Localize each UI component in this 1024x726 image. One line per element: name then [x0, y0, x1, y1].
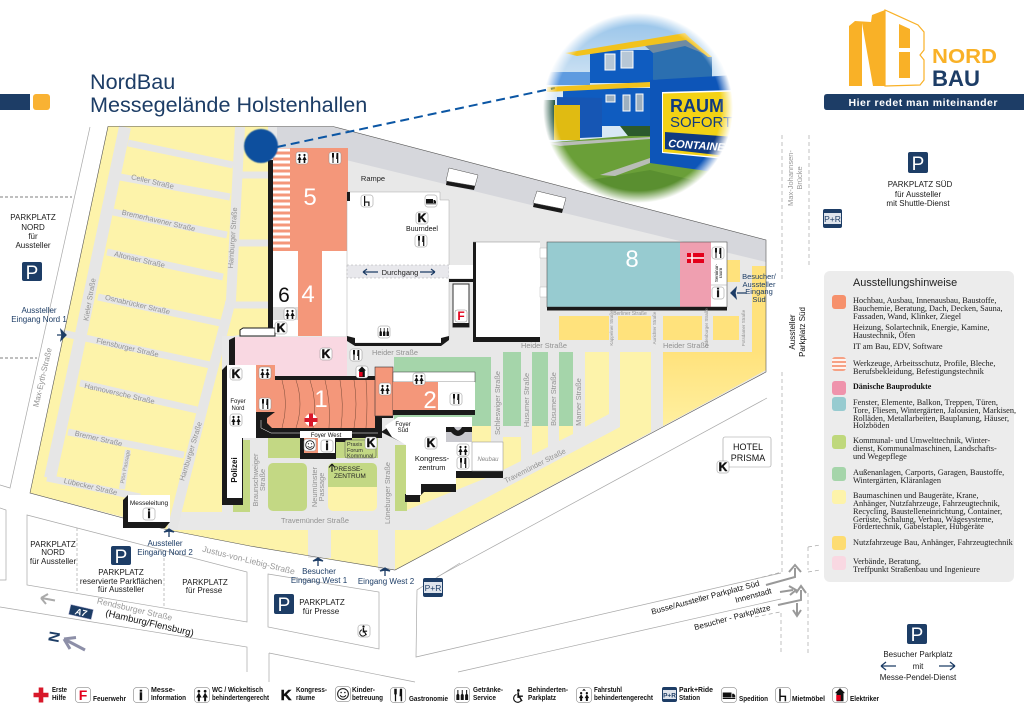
legend item: Messe-Information	[134, 687, 186, 703]
parking: reservierte Parkflächen: reservierte Parkflächen	[80, 577, 162, 586]
arrow: west	[41, 594, 55, 604]
legend text: Außenanlagen, Carports, Garagen, Baustoffe,	[853, 468, 1004, 477]
A7 sign	[69, 605, 93, 620]
photo: container building: SOFORT	[670, 114, 732, 131]
street labels: Neumünster	[310, 466, 319, 507]
street labels: Flensburger Straße	[96, 336, 160, 359]
legend item: Feuerwehr: F	[79, 687, 88, 703]
legend item: Behinderten-Parkplatz	[514, 687, 569, 702]
parking: reservierte Parkflächen: P	[115, 547, 127, 568]
K icon hall 6: K	[277, 321, 286, 335]
slogan banner: Hier redet man miteinander	[848, 97, 998, 109]
street labels: Braunschweiger	[251, 453, 260, 506]
P+R upper	[823, 209, 842, 228]
parking Besucher Pendel: Besucher Parkplatz	[883, 650, 953, 659]
street labels: Aurichter Straße	[652, 311, 657, 344]
hall 8	[547, 242, 727, 310]
legend item: Gastronomie: Gastronomie	[409, 696, 448, 703]
label: Max-Johannsen-Brücke: Brücke	[795, 166, 804, 190]
logo mark: B	[885, 10, 924, 86]
legend item: Park+Ride: Station	[679, 695, 700, 702]
legend text: Rolläden, Metallarbeiten, Bauplanung, Häuser,	[853, 414, 1009, 423]
hall 6 and 4: 4	[301, 281, 315, 308]
photo: container building	[544, 14, 732, 202]
legend item: Kongressräume	[281, 687, 328, 704]
street labels: Heider Straße	[372, 348, 418, 357]
Kongresszentrum: Neubau	[477, 457, 499, 463]
hall white centre	[473, 242, 547, 342]
legend item: Kongressräume: räume	[296, 695, 315, 702]
Kongresszentrum	[381, 417, 503, 502]
legend item: Fahrstuhl: behindertengerecht	[594, 695, 654, 702]
road labels south: (Hamburg/Flensburg)	[104, 608, 195, 639]
legend item: Messe-Information: Messe-	[151, 687, 176, 694]
entrance: Aussteller Eingang Nord 2	[137, 529, 193, 557]
band buildings	[446, 168, 566, 213]
Kongresszentrum: Süd	[398, 428, 408, 434]
title: Messegelände Holstenhallen	[90, 92, 367, 117]
parking Süd: P	[912, 154, 924, 175]
street labels: Max-Eyth-Straße	[31, 346, 54, 408]
logo wordmark: NORD	[932, 45, 997, 68]
legend text: dienst, Kommunalmaschinen, Landschafts-	[853, 444, 997, 453]
legend item: Erste Hilfe: Erste	[52, 687, 67, 694]
street labels: Travemünder Straße	[503, 446, 567, 485]
legend text: Hochbau, Ausbau, Innenausbau, Baustoffe,	[853, 296, 996, 305]
legend text: Haustechnik, Öfen	[853, 331, 916, 340]
marker: location circle	[244, 129, 278, 163]
hall 5	[268, 148, 348, 330]
street labels: Hannoversche Straße	[84, 381, 156, 406]
Praxis Forum Kommunal: Praxis	[347, 442, 363, 448]
legend item: Fahrstuhl	[576, 687, 654, 702]
Foyer West: Foyer West	[311, 433, 342, 439]
label: Aussteller Parkplatz Süd: Parkplatz Süd	[798, 307, 807, 357]
direction arrows and labels: Besucher - Parkplätze	[693, 603, 772, 632]
street labels: Lüneburger Straße	[383, 462, 392, 524]
info icon hall 8	[712, 286, 724, 300]
legend item: Kinderbetreuung: Kinder-	[352, 687, 376, 694]
legend text: Kommunal- und Umwelttechnik, Winter-	[853, 436, 990, 445]
P+R lower: P+R	[425, 583, 441, 593]
parking Besucher Pendel: P	[911, 625, 923, 646]
legend item: Getränke-Service	[454, 687, 504, 702]
Pressezentrum: ZENTRUM	[334, 473, 366, 480]
entrance: Eingang Süd: Aussteller	[743, 280, 776, 289]
legend text: Gerüste, Schalung, Verbau, Wägesysteme,	[853, 515, 993, 524]
hall 8: Seminar-	[714, 263, 719, 282]
hall 1	[256, 376, 382, 459]
parking: Presse Mitte: PARKPLATZ	[182, 578, 228, 587]
Foyer Nord	[222, 365, 275, 505]
legend item: WC: behindertengerecht	[212, 695, 270, 702]
Feuerwehr building: F	[457, 309, 465, 323]
photo: container building: RAUM	[670, 96, 724, 116]
entrance: Aussteller Eingang Nord 2: Aussteller	[147, 539, 183, 548]
parking: Nord für Aussteller: NORD	[41, 548, 65, 557]
road labels south: Rendsburger Straße	[96, 596, 174, 623]
parking: Presse: PARKPLATZ	[299, 598, 345, 607]
yellow blocks east	[407, 352, 609, 510]
street labels: Celler Straße	[130, 172, 175, 191]
north arrow	[44, 630, 85, 650]
header bar: left accents	[0, 94, 50, 110]
flag: Dänemark	[687, 253, 704, 263]
parking Süd: PARKPLATZ SÜD	[888, 180, 953, 189]
legend item: Feuerwehr	[76, 687, 126, 703]
parking: Presse: für Presse	[303, 607, 340, 616]
label: Max-Johannsen-Brücke: Max-Johannsen-	[786, 150, 795, 206]
street labels	[31, 172, 746, 525]
Foyer Nord: Nord	[231, 406, 245, 412]
icons Heider Straße	[350, 349, 368, 378]
green blocks: Kommunaltechnik	[233, 438, 407, 512]
road labels south	[96, 544, 296, 639]
K icon Buurndeel: K	[418, 211, 427, 225]
street labels: Heider Straße	[663, 341, 709, 350]
legend item: Erste Hilfe: Hilfe	[52, 695, 66, 702]
entrance: Aussteller Eingang Nord 1: Aussteller	[21, 306, 57, 315]
Foyer West	[300, 431, 352, 453]
street labels: Kieler Straße	[81, 278, 98, 322]
P+R upper: P+R	[824, 214, 841, 224]
legend item: Behinderten-Parkplatz: Parkplatz	[528, 695, 556, 702]
yellow block Presse	[328, 487, 377, 511]
legend item: Kinderbetreuung	[336, 686, 383, 702]
dashed connector	[277, 88, 555, 147]
legend item: Spedition	[722, 688, 768, 703]
legend title: Ausstellungshinweise	[853, 277, 957, 289]
hall 8: 8	[625, 246, 639, 273]
foyer east	[375, 367, 393, 418]
street labels: Berliner Straße	[613, 311, 647, 317]
legend text: Treffpunkt Straßenbau und Ingenieure	[853, 565, 980, 574]
legend item: Kongressräume: K	[281, 687, 292, 704]
hall 8: raum	[718, 268, 723, 278]
legend text: IT am Bau, EDV, Software	[853, 342, 943, 351]
parking: Presse: P	[278, 595, 290, 616]
legend item: Gastronomie	[390, 688, 448, 703]
yellow zone south	[168, 352, 651, 570]
Praxis Forum Kommunal: K	[367, 436, 376, 450]
Hotel Prisma	[717, 437, 771, 474]
rampe band	[277, 127, 766, 262]
parking: Nord für Aussteller: für Aussteller	[30, 557, 76, 566]
photo: container building: CONTAINER	[668, 138, 733, 155]
direction arrows and labels	[650, 565, 806, 632]
hall 2: 2	[423, 387, 437, 414]
hall 2	[393, 372, 475, 415]
legend text: Fassaden, Wand, Klinker, Ziegel	[853, 312, 962, 321]
parking Süd: mit Shuttle-Dienst	[886, 199, 950, 208]
street labels: Passage	[317, 473, 326, 501]
site outline	[30, 126, 766, 570]
exhibition site base	[30, 126, 766, 570]
Polizei: Polizei	[230, 457, 239, 483]
entrance: Eingang West 2: Eingang West 2	[358, 577, 415, 586]
legend text: Holzböden	[853, 421, 890, 430]
label: Aussteller Parkplatz Süd: Aussteller	[788, 314, 797, 350]
legend item: Park+Ride	[662, 687, 713, 702]
legend item: Getränke-Service: Getränke-	[473, 687, 504, 694]
Praxis Forum Kommunal: Forum	[347, 448, 363, 454]
legend item: Erste Hilfe	[34, 687, 67, 702]
info icon hall 8: i	[716, 286, 720, 300]
logo	[849, 10, 997, 91]
legend text: Dänische Bauprodukte	[853, 382, 932, 391]
south streets	[308, 528, 395, 570]
parking: Nord: NORD	[21, 223, 45, 232]
street labels: Oldenburger Straße	[704, 308, 709, 348]
parking Süd	[886, 152, 953, 208]
hall 5: 5	[303, 184, 317, 211]
Praxis Forum Kommunal	[345, 436, 377, 460]
Messeleitung: Messeleitung	[130, 500, 169, 507]
label: Aussteller Parkplatz Süd	[788, 307, 807, 357]
hall Buurndeel	[347, 174, 449, 346]
legend text: Tore, Fliesen, Wintergärten, Jalousien, Markisen,	[853, 406, 1016, 415]
parking: Nord für Aussteller	[30, 540, 76, 566]
Hotel Prisma: PRISMA	[731, 453, 765, 463]
street labels: Straße	[258, 469, 267, 491]
west streets	[47, 127, 268, 530]
A7 sign: A7	[73, 606, 89, 619]
legend swatches	[832, 295, 846, 570]
street labels: Bremerhavener Straße	[121, 208, 196, 233]
Hotel Prisma: K	[719, 460, 728, 474]
legend item: Behinderten-Parkplatz: Behinderten-	[528, 687, 569, 694]
legend item: Spedition: Spedition	[739, 696, 768, 703]
street labels: Kappelner Straße	[609, 310, 614, 346]
entrance: Eingang Süd: Süd	[752, 295, 766, 304]
Praxis Forum Kommunal: Kommunal	[347, 454, 373, 460]
legend text: Bauchemie, Beratung, Dach, Decken, Sauna,	[853, 304, 1003, 313]
legend text: Fenster, Elemente, Balkon, Treppen, Türen,	[853, 398, 998, 407]
legend item: Park+Ride: P+R	[663, 692, 676, 700]
parking: Presse	[274, 594, 370, 637]
street labels: Marner Straße	[574, 378, 583, 426]
legend text: Anhänger, Nutzfahrzeuge, Fahrzeugtechnik,	[853, 499, 1000, 508]
Kongresszentrum: Foyer	[395, 422, 411, 428]
street labels: Hamburger Straße	[177, 421, 204, 482]
legend item: Elektriker	[832, 688, 879, 703]
legend item: WC	[194, 687, 270, 702]
parking: Nord: P	[26, 263, 38, 284]
legend text: Werkzeuge, Arbeitsschutz, Profile, Bleche,	[853, 359, 995, 368]
Hotel Prisma: HOTEL	[733, 442, 763, 452]
legend item: Mietmöbel: Mietmöbel	[792, 696, 825, 703]
parking Besucher Pendel	[880, 624, 957, 682]
street labels: Osnabrücker Straße	[104, 293, 171, 316]
Foyer Nord: K	[232, 367, 241, 381]
pink hall Verbände	[229, 337, 347, 377]
parking: Nord für Aussteller: PARKPLATZ	[30, 540, 76, 549]
title: NordBau	[90, 69, 175, 94]
entrance: Aussteller Eingang Nord 1: Eingang Nord 1	[11, 315, 67, 324]
Durchgang	[347, 265, 473, 278]
title	[90, 69, 367, 117]
parking: Nord: für	[28, 232, 38, 241]
Foyer Nord: Foyer	[230, 399, 246, 405]
logo mark: N	[849, 10, 885, 86]
label: Max-Johannsen-Brücke	[786, 150, 804, 206]
Kongresszentrum: K	[427, 436, 436, 450]
street labels: Altonaer Straße	[113, 249, 166, 270]
slogan banner	[824, 94, 1024, 110]
hall Buurndeel: Buurndeel	[406, 226, 438, 233]
legend item: Messe-Information: i	[139, 687, 143, 703]
street labels: Bremer Straße	[74, 429, 123, 448]
parking: reservierte Parkflächen: für Aussteller	[98, 585, 144, 594]
street labels: Husumer Straße	[522, 373, 531, 427]
bottom icon legend	[34, 686, 879, 704]
legend text: Fördertechnik, Gabelstapler, Hubgeräte	[853, 522, 984, 531]
legend text: Recycling, Baustelleneinrichtung, Container,	[853, 507, 1002, 516]
Durchgang: Durchgang	[382, 268, 418, 277]
surrounding roads and parking outlines	[0, 127, 820, 682]
legend text: Nutzfahrzeuge Bau, Anhänger, Fahrzeugtechnik	[853, 538, 1014, 547]
legend item: Elektriker: Elektriker	[850, 696, 879, 703]
parking Besucher Pendel: mit	[913, 662, 924, 671]
entrance: Besucher Eingang West 1: Besucher	[302, 567, 336, 576]
hall 1: 1	[314, 386, 328, 413]
legend text: Wintergärten, Kläranlagen	[853, 476, 942, 485]
entrance: Eingang West 2	[358, 568, 415, 586]
hall 6 and 4: 6	[278, 284, 290, 307]
gray Braunschweiger area	[222, 336, 268, 512]
legend item: Kinderbetreuung: betreuung	[352, 695, 383, 702]
Pressezentrum	[329, 464, 366, 480]
legend panel	[824, 271, 1016, 582]
direction arrows and labels: Busse/Aussteller Parkplatz Süd	[650, 579, 760, 616]
parking: Presse Mitte	[182, 578, 228, 595]
legend text: Verbände, Beratung,	[853, 557, 921, 566]
yellow zone west	[30, 126, 268, 530]
legend text: und Wegepflege	[853, 452, 907, 461]
Messeleitung	[123, 495, 170, 528]
legend text: Baumaschinen und Baugeräte, Krane,	[853, 491, 979, 500]
P+R lower	[423, 578, 443, 597]
Messeleitung: i	[147, 507, 151, 521]
parking: reservierte Parkflächen: PARKPLATZ	[98, 568, 144, 577]
hall Buurndeel: Rampe	[361, 174, 385, 183]
legend item: Getränke-Service: Service	[473, 695, 496, 702]
legend text: Berufsbekleidung, Befestigungstechnik	[853, 367, 985, 376]
direction arrows and labels: Innenstadt	[734, 586, 773, 605]
street labels: Travemünder Straße	[281, 516, 349, 525]
Feuerwehr building	[449, 279, 473, 327]
Pressezentrum: PRESSE-	[334, 466, 363, 473]
street labels: Schleswiger Straße	[493, 371, 502, 435]
street labels: Büsumer Straße	[549, 372, 558, 426]
north arrow: N	[44, 630, 63, 644]
legend text: Heizung, Solartechnik, Energie, Kamine,	[853, 323, 989, 332]
parking: Nord: PARKPLATZ	[10, 213, 56, 222]
street labels: Plön Passage	[120, 450, 132, 484]
parking Besucher Pendel: Messe-Pendel-Dienst	[880, 673, 957, 682]
entrance: Eingang Süd: Eingang	[745, 287, 773, 296]
Kongresszentrum: zentrum	[418, 463, 446, 472]
Kongresszentrum: Kongress-	[415, 454, 450, 463]
parking: Nord: Aussteller	[15, 241, 51, 250]
entrance: Besucher Eingang West 1: Eingang West 1	[291, 576, 348, 585]
legend item: Feuerwehr: Feuerwehr	[93, 696, 126, 703]
K icon pink hall: K	[322, 347, 331, 361]
entrance: Eingang Süd	[731, 272, 777, 304]
hall 6 and 4	[240, 251, 347, 336]
logo: BAU	[932, 66, 980, 91]
green blocks: Außenanlagen	[394, 352, 573, 426]
street labels: Lübecker Straße	[63, 476, 118, 497]
entrance: Besucher Eingang West 1	[291, 558, 348, 585]
entrance: Aussteller Eingang Nord 1	[11, 306, 67, 340]
legend text	[853, 296, 1016, 574]
street labels: Hamburger Straße	[226, 207, 239, 269]
Foyer West: i	[325, 439, 329, 453]
legend item: Park+Ride: Park+Ride	[679, 687, 713, 694]
entrance: Eingang Süd: Besucher/	[742, 272, 777, 281]
entrance: Aussteller Eingang Nord 2: Eingang Nord 2	[137, 548, 193, 557]
parking Süd: für Aussteller	[895, 190, 941, 199]
legend item: Messe-Information: Information	[151, 695, 186, 702]
Polizei	[227, 438, 242, 498]
street labels: Potsdamer Straße	[741, 309, 746, 346]
parking: Presse Mitte: für Presse	[186, 586, 223, 595]
road labels south: Justus-von-Liebig-Straße	[201, 544, 296, 576]
legend item: Kongressräume: Kongress-	[296, 687, 328, 694]
street labels: Heider Straße	[521, 341, 567, 350]
legend item: Fahrstuhl: Fahrstuhl	[594, 687, 622, 694]
legend item: Mietmöbel	[776, 688, 825, 703]
legend item: WC: WC / Wickeltisch	[212, 687, 263, 694]
parking: reservierte Parkflächen	[80, 546, 162, 594]
parking: Nord	[10, 213, 56, 284]
gold blocks: Nutzfahrzeuge	[559, 260, 766, 426]
